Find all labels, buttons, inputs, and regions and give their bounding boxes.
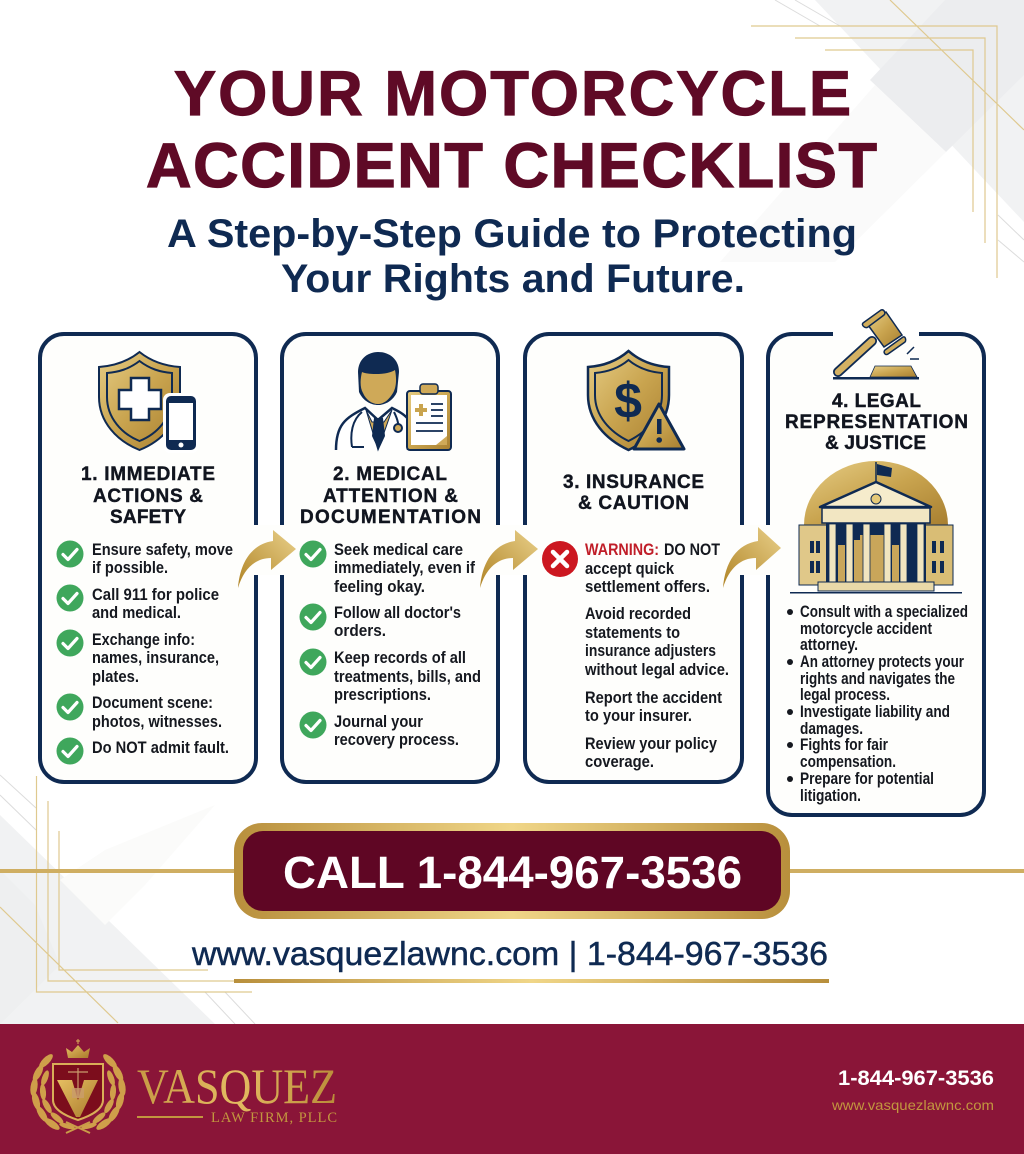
heading: step 4: REPRESENTATION <box>785 412 968 433</box>
checklist: step 1: plates. <box>92 667 139 686</box>
text: insurance advice: coverage. <box>585 752 654 771</box>
list: legal bullets: rights and navigates the <box>800 670 955 688</box>
checklist: step 1: Call 911 for police <box>92 585 219 604</box>
icon: shield with cross and phone <box>99 352 199 453</box>
footer band <box>0 1024 1024 1154</box>
subtitle: A Step-by-Step Guide to Protecting <box>167 212 857 256</box>
checklist: step 2 <box>300 540 481 749</box>
list: legal bullets: Consult with a specialized <box>800 603 968 621</box>
arrow: step 1 to step 2 <box>238 525 296 588</box>
icon: courthouse <box>790 461 962 594</box>
list: legal bullets: compensation. <box>800 753 896 771</box>
checklist: step 2: prescriptions. <box>334 685 431 704</box>
title: YOUR MOTORCYCLE <box>174 59 851 129</box>
warning callout <box>542 540 721 596</box>
logo crest <box>29 1039 127 1133</box>
panel: immediate actions and safety <box>40 334 256 782</box>
list: legal bullets: attorney. <box>800 636 858 654</box>
website and phone line: www.vasquezlawnc.com | 1-844-967-3536 <box>191 935 828 972</box>
list: legal bullets: An attorney protects your <box>800 653 964 671</box>
checklist: step 1: Document scene: <box>92 693 213 712</box>
checklist: step 2: Keep records of all <box>334 648 466 667</box>
checklist: step 2: Follow all doctor's <box>334 603 461 622</box>
call to action button <box>234 823 790 919</box>
footer contact <box>831 1067 994 1113</box>
heading: step 1: ACTIONS & <box>93 486 203 507</box>
divider line behind call button <box>0 869 1024 873</box>
list: legal bullets <box>787 603 968 805</box>
warning callout: WARNING: <box>585 540 659 559</box>
checklist: step 2: Seek medical care <box>334 540 463 559</box>
panel: medical attention and documentation <box>282 334 498 782</box>
heading: step 2: DOCUMENTATION <box>300 507 481 528</box>
heading: step 4: & JUSTICE <box>825 433 926 454</box>
heading: step 3 <box>563 472 704 514</box>
heading: step 1 <box>81 464 215 528</box>
icon: doctor with clipboard <box>336 352 451 450</box>
text: insurance advice: statements to <box>585 623 680 642</box>
subtitle: Your Rights and Future. <box>281 257 745 301</box>
panel: insurance and caution <box>525 334 742 782</box>
checklist: step 1: Do NOT admit fault. <box>92 738 229 757</box>
title <box>146 59 877 201</box>
checklist: step 1 <box>56 540 233 764</box>
list: legal bullets: damages. <box>800 720 863 738</box>
heading: step 3: 3. INSURANCE <box>563 472 704 493</box>
footer contact: 1-844-967-3536 <box>838 1067 994 1090</box>
text: insurance advice: Review your policy <box>585 734 717 753</box>
warning callout: accept quick <box>585 559 674 578</box>
heading: step 4 <box>785 391 968 454</box>
list: legal bullets: motorcycle accident <box>800 620 932 638</box>
heading: step 2 <box>300 464 481 528</box>
heading: step 3: & CAUTION <box>578 493 689 514</box>
heading: step 1: SAFETY <box>110 507 186 528</box>
arrow: step 2 to step 3 <box>480 525 538 588</box>
checklist: step 1: Ensure safety, move <box>92 540 233 559</box>
warning callout: settlement offers. <box>585 577 710 596</box>
text: insurance advice: Avoid recorded <box>585 604 691 623</box>
checklist: step 1: names, insurance, <box>92 648 219 667</box>
text: insurance advice: to your insurer. <box>585 706 692 725</box>
checklist: step 2: feeling okay. <box>334 577 425 596</box>
icon: gavel <box>833 310 919 380</box>
checklist: step 1: and medical. <box>92 603 181 622</box>
text: insurance advice: without legal advice. <box>584 660 729 679</box>
list: legal bullets: litigation. <box>800 787 861 805</box>
checklist: step 2: Journal your <box>334 712 423 731</box>
list: legal bullets: Investigate liability and <box>800 703 950 721</box>
footer contact: www.vasquezlawnc.com <box>831 1097 994 1113</box>
heading: step 2: 2. MEDICAL <box>333 464 447 485</box>
checklist: step 2: treatments, bills, and <box>334 667 481 686</box>
checklist: step 1: Exchange info: <box>92 630 195 649</box>
logo wordmark: LAW FIRM, PLLC <box>211 1110 337 1126</box>
heading: step 4: 4. LEGAL <box>832 391 921 412</box>
title: ACCIDENT CHECKLIST <box>146 131 877 201</box>
checklist: step 2: orders. <box>334 621 386 640</box>
list: legal bullets: Fights for fair <box>800 736 888 754</box>
heading: step 1: 1. IMMEDIATE <box>81 464 215 485</box>
logo wordmark: VASQUEZ <box>137 1058 337 1114</box>
subtitle <box>167 212 857 301</box>
text: insurance advice: insurance adjusters <box>585 641 716 660</box>
panel: legal representation and justice <box>768 310 984 815</box>
checklist: step 2: recovery process. <box>334 730 459 749</box>
arrow: step 3 to step 4 <box>723 525 781 588</box>
icon: shield with dollar and warning <box>588 351 684 450</box>
list: legal bullets: legal process. <box>800 686 890 704</box>
list: legal bullets: Prepare for potential <box>800 770 934 788</box>
call to action button: CALL 1-844-967-3536 <box>283 847 742 898</box>
text: insurance advice <box>584 604 729 771</box>
checklist: step 2: immediately, even if <box>334 558 475 577</box>
checklist: step 1: if possible. <box>92 558 168 577</box>
heading: step 2: ATTENTION & <box>323 486 458 507</box>
text: insurance advice: Report the accident <box>585 688 722 707</box>
icon: shield with dollar and warning: $ <box>614 373 642 429</box>
checklist: step 1: photos, witnesses. <box>92 712 222 731</box>
warning callout: DO NOT <box>664 540 721 559</box>
